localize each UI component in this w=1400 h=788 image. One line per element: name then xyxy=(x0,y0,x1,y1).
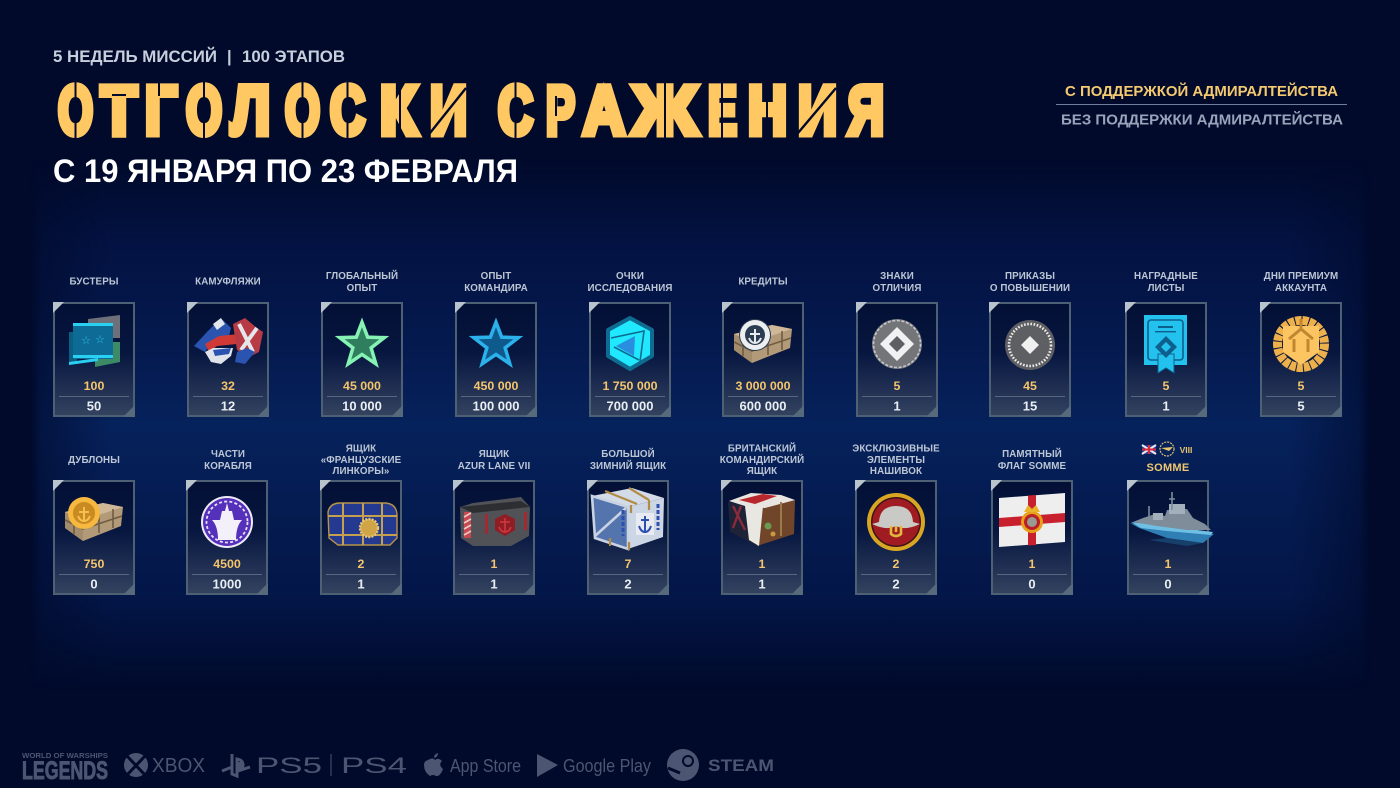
values xyxy=(893,379,901,414)
card: commander xp xyxy=(455,271,537,417)
icon: camouflage patches xyxy=(194,318,263,364)
card: premium days xyxy=(1260,271,1342,417)
title: Р xyxy=(546,72,575,149)
card: ship somme xyxy=(1127,442,1214,595)
values: 5 xyxy=(1297,398,1305,414)
card: somme memorial flag: ПАМЯТНЫЙ xyxy=(1002,448,1062,460)
card: camouflage xyxy=(187,276,269,417)
values xyxy=(892,557,900,592)
icon: green star xyxy=(340,322,384,364)
card: commander xp: ОПЫТ xyxy=(481,271,511,282)
card: british commander box: ЯЩИК xyxy=(747,466,777,477)
card: french battleships chest xyxy=(320,444,402,595)
card: british commander box: БРИТАНСКИЙ xyxy=(728,442,796,454)
values xyxy=(758,557,766,592)
card: boosters xyxy=(53,276,135,417)
ship tier and name xyxy=(1142,442,1192,474)
card: azur lane chest: ЯЩИК xyxy=(479,449,509,460)
values: 0 xyxy=(1164,576,1172,592)
values xyxy=(472,379,520,414)
legend: admiralty support xyxy=(1056,82,1347,128)
values xyxy=(602,379,658,414)
values: 45 000 xyxy=(343,379,381,393)
values: 3 000 000 xyxy=(735,379,791,393)
icon: french chest xyxy=(328,503,397,545)
card: promotion orders xyxy=(989,271,1071,417)
values: 1 xyxy=(491,557,498,571)
title: О xyxy=(58,72,93,149)
card: global xp: ГЛОБАЛЬНЫЙ xyxy=(326,270,398,282)
title: И xyxy=(798,72,837,149)
card: research points: ОЧКИ xyxy=(616,271,644,282)
values xyxy=(1028,557,1036,592)
values: 10 000 xyxy=(342,398,382,414)
title: Ж xyxy=(632,72,698,149)
logo: xbox xyxy=(124,753,205,777)
card: big winter box: ЗИМНИЙ ЯЩИК xyxy=(590,460,666,472)
values xyxy=(624,557,632,592)
values: 0 xyxy=(1028,576,1036,592)
card: camouflage: КАМУФЛЯЖИ xyxy=(195,276,261,288)
title: О xyxy=(285,72,320,149)
title: Т xyxy=(101,72,137,149)
title: О xyxy=(186,72,222,149)
card: british commander box: КОМАНДИРСКИЙ xyxy=(720,454,804,466)
title: А xyxy=(583,72,625,149)
card: exclusive patch elements: ЭЛЕМЕНТЫ xyxy=(867,455,925,466)
values: 45 xyxy=(1023,379,1037,393)
card: ship parts xyxy=(186,449,268,595)
icon: blue star xyxy=(474,322,518,364)
legend: admiralty support: БЕЗ ПОДДЕРЖКИ АДМИРАЛТЕЙСТВА xyxy=(1061,110,1343,128)
card: big winter box xyxy=(587,448,669,595)
values: 2 xyxy=(358,557,365,571)
values: 1 xyxy=(893,398,901,414)
icon: booster flags: ☆ xyxy=(95,334,105,346)
title: Е xyxy=(708,72,737,149)
values: 5 xyxy=(894,379,901,393)
icon: booster flags: ☆ xyxy=(81,335,91,347)
values xyxy=(213,557,241,592)
subtitle: missions and stages: 100 ЭТАПОВ xyxy=(242,48,345,66)
title: И xyxy=(430,72,467,149)
values xyxy=(1164,557,1172,592)
card: french battleships chest: ЯЩИК xyxy=(346,444,376,454)
values: 2 xyxy=(892,576,900,592)
card: award sheets: НАГРАДНЫЕ xyxy=(1134,271,1198,282)
title: К xyxy=(380,72,418,149)
values: 100 xyxy=(84,379,104,393)
values: 12 xyxy=(221,398,235,414)
values: 700 000 xyxy=(606,398,654,414)
card: award sheets: ЛИСТЫ xyxy=(1148,283,1184,294)
card: british commander box xyxy=(720,442,804,595)
values: 7 xyxy=(625,557,632,571)
card: french battleships chest: «ФРАНЦУЗСКИЕ xyxy=(321,455,402,466)
values: 32 xyxy=(221,379,235,393)
logo: world of warships legends: WORLD OF WARSHIPS xyxy=(22,753,108,760)
footer: platform logos xyxy=(22,749,774,785)
values: 5 xyxy=(1163,379,1170,393)
icon: credits crate and coin xyxy=(734,319,792,363)
card: somme memorial flag: ФЛАГ SOMME xyxy=(998,461,1066,472)
values: 2 xyxy=(624,576,632,592)
values: 750 xyxy=(84,557,104,571)
card: distinctions xyxy=(856,271,938,417)
card: commander xp: КОМАНДИРА xyxy=(464,283,528,294)
card: ship parts: ЧАСТИ xyxy=(211,449,245,460)
card: distinctions: ЗНАКИ xyxy=(880,271,914,282)
logo: app store xyxy=(424,753,521,776)
icon: award sheet xyxy=(1144,315,1187,373)
values xyxy=(1023,379,1037,414)
icon: somme flag xyxy=(999,493,1065,547)
card: premium days: ДНИ ПРЕМИУМ xyxy=(1264,271,1338,282)
values xyxy=(357,557,365,592)
legend: admiralty support: С ПОДДЕРЖКОЙ АДМИРАЛТЕЙСТВА xyxy=(1065,82,1338,100)
icon: distinction badge xyxy=(872,319,922,369)
card: doubloons xyxy=(53,455,135,595)
values: 450 000 xyxy=(474,379,518,393)
card: promotion orders: О ПОВЫШЕНИИ xyxy=(990,283,1070,294)
card: credits xyxy=(722,276,804,417)
values xyxy=(84,557,104,592)
icon: azur lane box xyxy=(460,497,530,546)
card: research points: ИССЛЕДОВАНИЯ xyxy=(588,283,672,294)
values xyxy=(84,379,104,414)
logo: world of warships legends: LEGENDS xyxy=(22,757,108,785)
values: 4500 xyxy=(213,557,241,571)
values: 2 xyxy=(893,557,900,571)
values: 100 000 xyxy=(472,398,520,414)
logo: google play xyxy=(537,754,651,777)
icon: booster flags xyxy=(69,315,120,367)
card: doubloons: ДУБЛОНЫ xyxy=(68,455,120,466)
values: 1 xyxy=(1029,557,1036,571)
values: 50 xyxy=(87,398,101,414)
logo: google play: Google Play xyxy=(563,756,651,776)
logo: steam: STEAM xyxy=(708,756,774,775)
logo: app store: App Store xyxy=(450,756,521,776)
card: exclusive patch elements xyxy=(852,444,940,595)
values: 15 xyxy=(1023,398,1037,414)
card: award sheets xyxy=(1125,271,1207,417)
card: distinctions: ОТЛИЧИЯ xyxy=(873,283,921,294)
logo: steam xyxy=(667,749,774,781)
card: promotion orders: ПРИКАЗЫ xyxy=(1005,271,1055,282)
card: research points xyxy=(588,271,672,417)
icon: winter box xyxy=(592,488,664,550)
logo: playstation 5 and 4: PS5 xyxy=(256,753,322,778)
icon: helmet patch xyxy=(867,493,925,551)
card: french battleships chest: ЛИНКОРЫ» xyxy=(333,466,390,477)
values xyxy=(1297,379,1305,414)
title: С xyxy=(498,72,533,149)
card: azur lane chest xyxy=(453,449,535,595)
subtitle: missions and stages: | xyxy=(227,48,232,66)
values: 1 xyxy=(357,576,365,592)
card: somme memorial flag xyxy=(991,448,1073,595)
icon: destroyer ship xyxy=(1130,492,1214,546)
card: global xp xyxy=(321,270,403,417)
icon: ship parts badge xyxy=(201,496,253,548)
card: credits: КРЕДИТЫ xyxy=(738,276,788,288)
card: exclusive patch elements: ЭКСКЛЮЗИВНЫЕ xyxy=(852,444,940,454)
ship tier and name: SOMME xyxy=(1146,462,1190,474)
logo: playstation 5 and 4: PS4 xyxy=(341,753,407,778)
ship tier and name: VIII xyxy=(1180,445,1192,455)
values xyxy=(1162,379,1170,414)
values: 1000 xyxy=(213,576,241,592)
card: premium days: АККАУНТА xyxy=(1275,283,1327,294)
icon: doubloon crate and coin xyxy=(65,497,123,541)
title: Н xyxy=(748,72,787,149)
icon: british box xyxy=(728,493,795,546)
card: boosters: БУСТЕРЫ xyxy=(69,276,119,288)
title: Г xyxy=(145,72,177,149)
title: Л xyxy=(231,72,270,149)
background xyxy=(34,189,1366,664)
logo: playstation 5 and 4 xyxy=(222,753,407,778)
values xyxy=(735,379,791,414)
values: 1 xyxy=(490,576,498,592)
card: exclusive patch elements: НАШИВОК xyxy=(870,466,922,477)
values: 1 xyxy=(759,557,766,571)
title xyxy=(58,72,884,149)
values: 5 xyxy=(1298,379,1305,393)
date range: С 19 ЯНВАРЯ ПО 23 ФЕВРАЛЯ xyxy=(53,153,518,189)
values xyxy=(342,379,382,414)
values: 1 xyxy=(1165,557,1172,571)
card: azur lane chest: AZUR LANE VII xyxy=(458,461,530,472)
icon: research hexagon xyxy=(608,318,652,369)
values: 1 750 000 xyxy=(602,379,658,393)
values: 0 xyxy=(90,576,98,592)
values xyxy=(490,557,498,592)
logo: xbox: XBOX xyxy=(152,755,205,777)
values: 1 xyxy=(758,576,766,592)
values: 1 xyxy=(1162,398,1170,414)
card: big winter box: БОЛЬШОЙ xyxy=(601,448,655,460)
title: С xyxy=(330,72,365,149)
icon: promotion seal xyxy=(1005,320,1055,370)
icon: gold shield wreath xyxy=(1278,319,1324,368)
values: 600 000 xyxy=(740,398,786,414)
title: Я xyxy=(848,72,884,149)
logo: world of warships legends xyxy=(22,753,108,785)
values xyxy=(221,379,235,414)
card: global xp: ОПЫТ xyxy=(347,283,377,294)
subtitle: missions and stages: 5 НЕДЕЛЬ МИССИЙ xyxy=(53,47,217,66)
card: ship parts: КОРАБЛЯ xyxy=(204,461,252,472)
